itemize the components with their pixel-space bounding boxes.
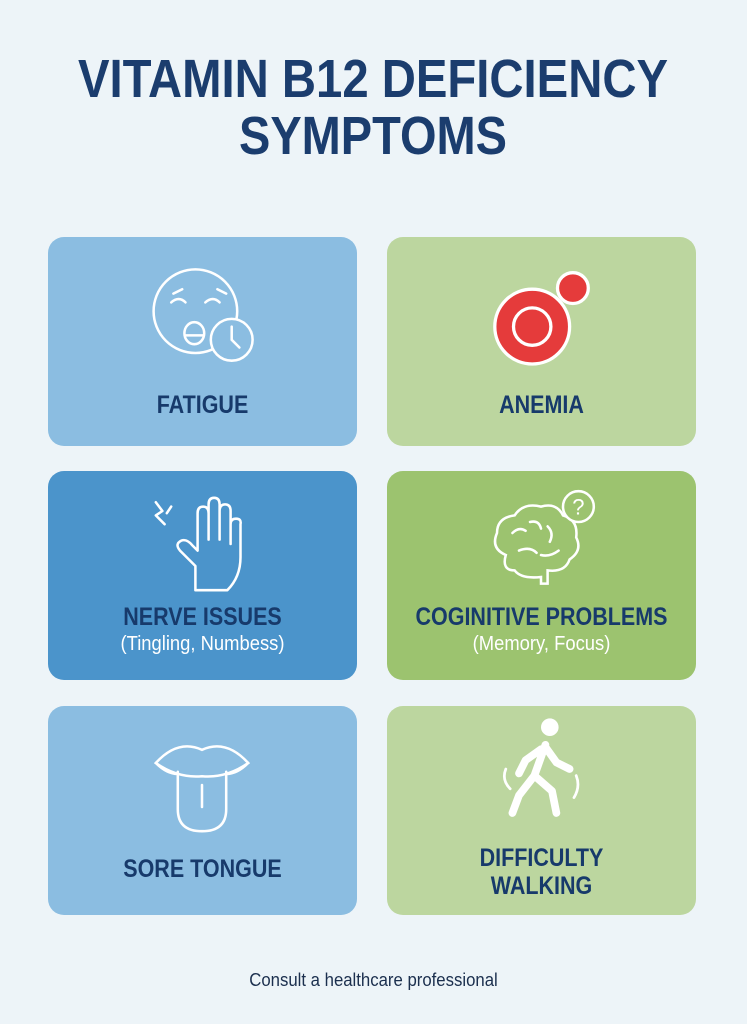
panel: anemia <box>387 237 696 446</box>
title <box>78 49 668 166</box>
panel: sore tongue <box>48 706 357 915</box>
subtitle: (Tingling, Numbess) <box>121 633 284 655</box>
label <box>480 844 603 900</box>
label: WALKING <box>491 872 592 900</box>
title: SYMPTOMS <box>239 106 507 166</box>
label: NERVE ISSUES <box>123 603 282 631</box>
label: DIFFICULTY <box>480 844 603 872</box>
icon: walking figure <box>503 718 580 817</box>
panel: fatigue <box>48 237 357 446</box>
icon: hand with zap <box>154 496 242 592</box>
footer note: Consult a healthcare professional <box>249 970 498 990</box>
label: FATIGUE <box>157 391 248 419</box>
label: COGINITIVE PROBLEMS <box>415 603 668 631</box>
icon: tongue <box>154 745 250 832</box>
panel: difficulty walking <box>387 706 696 915</box>
icon: tired face with clock <box>152 268 254 362</box>
icon: brain with question <box>494 490 596 585</box>
panel: cognitive problems <box>387 471 696 680</box>
icon: brain with question: ? <box>572 494 585 519</box>
label: ANEMIA <box>499 391 584 419</box>
subtitle: (Memory, Focus) <box>473 633 610 655</box>
panel: nerve issues <box>48 471 357 680</box>
label: SORE TONGUE <box>123 855 282 883</box>
icon: blood cell <box>493 271 590 366</box>
title: VITAMIN B12 DEFICIENCY <box>78 49 668 109</box>
